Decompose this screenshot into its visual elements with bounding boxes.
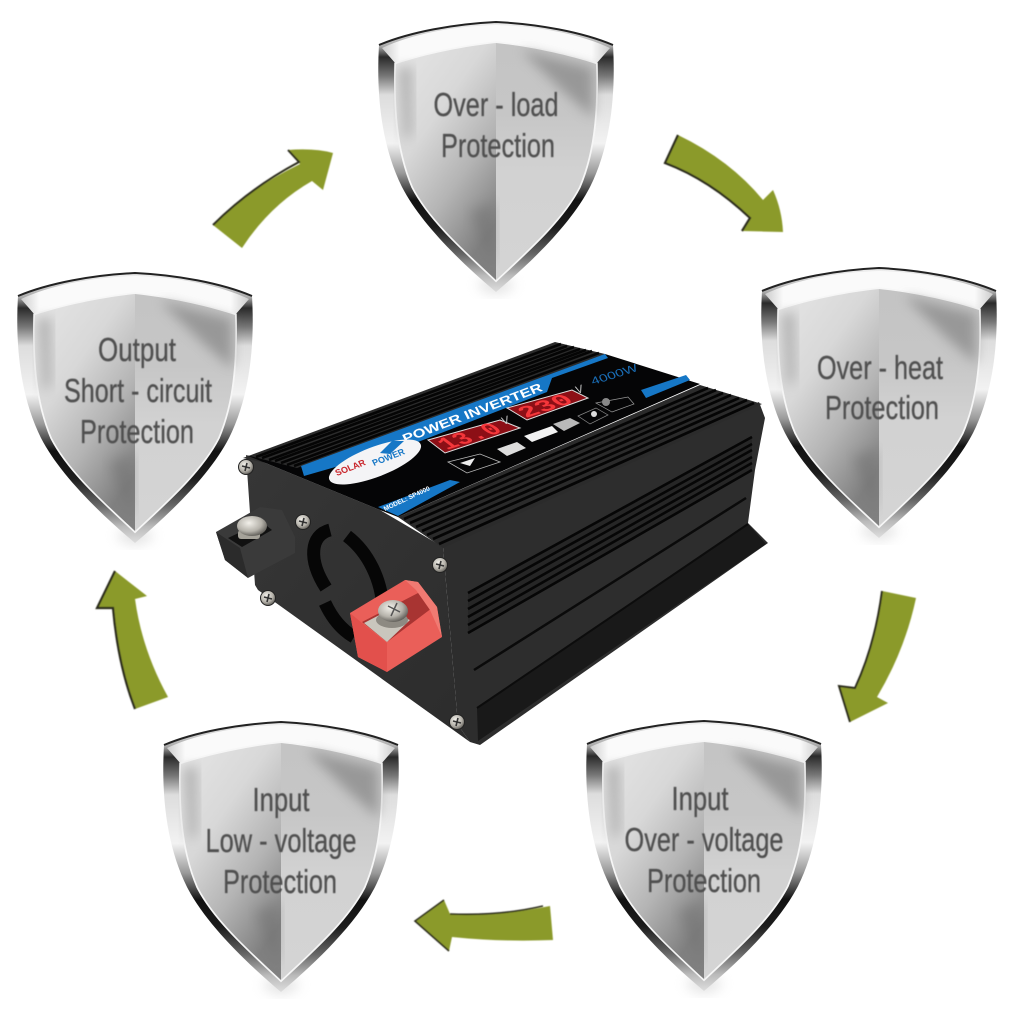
display: output voltage	[507, 390, 588, 422]
label: Over-heat Protection: Protection	[825, 389, 939, 426]
label: Input Over-voltage Protection	[624, 780, 784, 899]
label: Output Short-circuit Protection: Output	[98, 331, 176, 368]
4000W text: 4000W	[589, 362, 641, 388]
label: Input Low-voltage Protection: Protection	[223, 863, 337, 900]
label: Over-heat Protection: Over - heat	[817, 349, 943, 386]
label: Input Over-voltage Protection: Over - voltage	[624, 821, 784, 858]
label: Over-load Protection: Over - load	[434, 86, 558, 123]
label: Output Short-circuit Protection	[64, 331, 212, 450]
negative terminal	[216, 507, 295, 578]
digits 13.0: 13.0	[432, 420, 510, 455]
arrow: right shield to lower right shield	[839, 591, 916, 722]
unit V marks	[500, 383, 586, 428]
shield: Input Low-voltage Protection	[163, 722, 399, 994]
negative terminal bolt	[237, 516, 267, 539]
label: Input Low-voltage Protection: Input	[252, 781, 310, 818]
logo swoosh	[380, 441, 404, 454]
inverter front face	[246, 455, 470, 742]
logo text POWER: POWER	[370, 446, 407, 468]
inverter top ribs, rear	[243, 342, 605, 470]
screw: front bottom left	[260, 590, 276, 606]
arrow: left shield to top shield	[213, 149, 333, 248]
arrow: lower right shield to lower left shield	[415, 900, 553, 951]
display: input voltage	[428, 420, 520, 455]
shield: Over-load Protection	[378, 22, 614, 294]
label: Output Short-circuit Protection: Short - circuit	[64, 372, 212, 409]
model tag	[378, 480, 460, 516]
screw: by negative terminal	[296, 514, 310, 530]
label: Input Over-voltage Protection: Protection	[647, 862, 761, 899]
label: Input Low-voltage Protection	[206, 781, 356, 900]
brand logo	[324, 430, 426, 494]
inverter top ribs, front	[398, 385, 762, 548]
label: Over-heat Protection	[817, 349, 943, 426]
inverter side face with ribs	[443, 402, 768, 745]
label: Input Over-voltage Protection: Input	[672, 780, 728, 817]
inverter black label panel	[246, 354, 700, 517]
positive terminal bolt	[376, 600, 408, 628]
unit V marks: V	[500, 414, 512, 428]
screw: front bottom right	[450, 714, 464, 730]
label: Over-load Protection: Protection	[441, 127, 555, 164]
arrow: top shield to right shield	[665, 135, 783, 232]
digits 230: 230	[512, 391, 581, 422]
unit V marks: V	[574, 383, 586, 397]
label: Input Low-voltage Protection: Low - voltage	[206, 822, 356, 859]
arrow: lower left shield to left shield	[97, 571, 168, 709]
blue stripe	[301, 354, 608, 476]
label: Over-load Protection	[434, 86, 558, 164]
positive terminal red cover	[350, 580, 442, 672]
status icons	[448, 397, 634, 473]
model text: MODEL: SP4000	[383, 485, 432, 513]
shield: Input Over-voltage Protection	[586, 721, 822, 993]
fan grille	[314, 530, 383, 637]
logo text SOLAR: SOLAR	[333, 457, 368, 478]
POWER INVERTER text: POWER INVERTER	[400, 381, 545, 446]
screw: front top left	[238, 460, 254, 474]
power inverter	[216, 342, 768, 745]
label: Output Short-circuit Protection: Protection	[80, 413, 194, 450]
shield: Output Short-circuit Protection	[17, 273, 253, 545]
shield: Over-heat Protection	[761, 268, 997, 540]
screw: front top right	[432, 558, 448, 572]
spec tag	[641, 375, 690, 398]
